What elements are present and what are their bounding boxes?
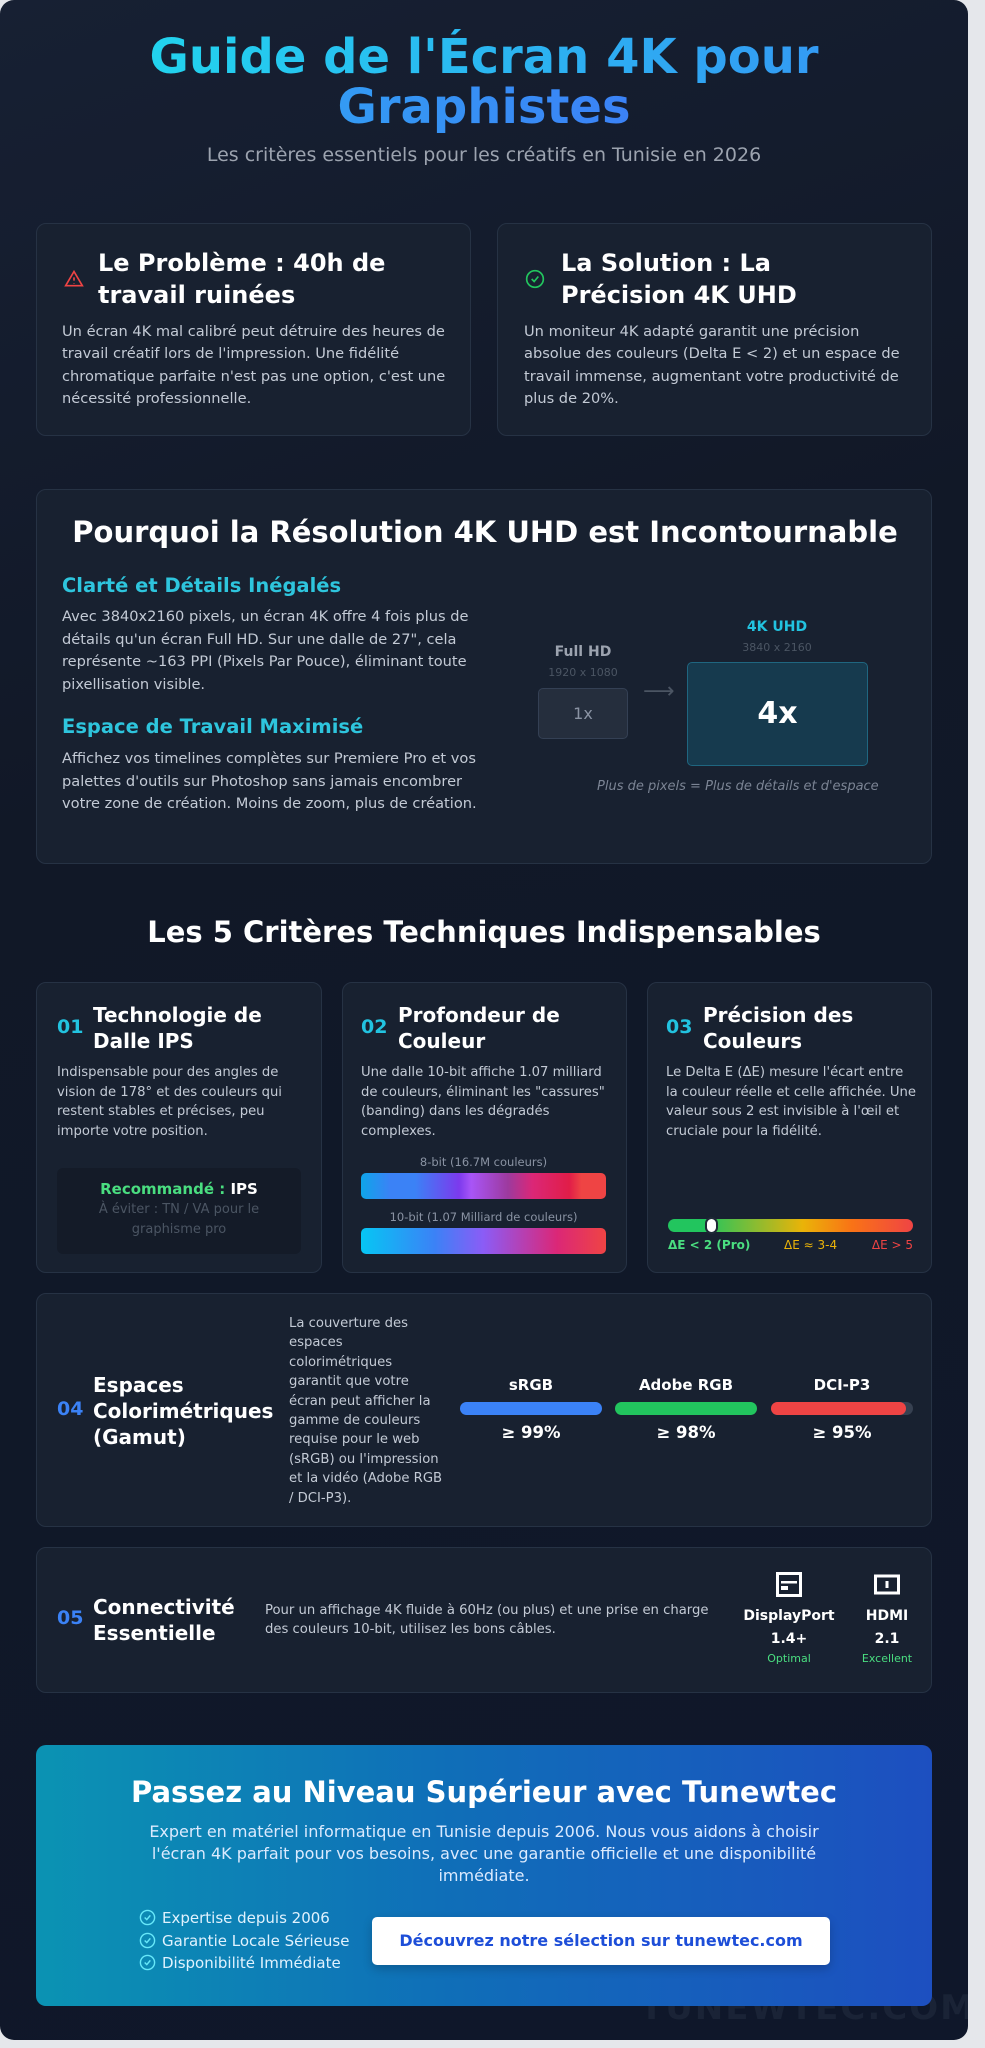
icon: hdmi: 2.1 — [875, 1631, 899, 1647]
button: Découvrez notre sélection sur tunewtec.com — [399, 1931, 803, 1950]
chart: 8-bit — [361, 1155, 606, 1199]
number 03: 03 — [666, 1016, 692, 1038]
heading: why: Pourquoi la Résolution 4K UHD est Incontournable — [72, 515, 898, 549]
panel: criterion 01 — [36, 982, 322, 1273]
number 02: 02 — [361, 1016, 387, 1038]
chart: DCI-P3 — [771, 1376, 913, 1442]
panel: solution — [497, 223, 932, 436]
number 01: 01 — [57, 1016, 83, 1038]
chart: resolution comparison — [538, 619, 879, 794]
chart: delta E scale: ΔE > 5 — [872, 1238, 913, 1252]
chart: delta E scale — [668, 1219, 913, 1252]
chart: 8-bit: 8-bit (16.7M couleurs) — [420, 1155, 547, 1169]
box: 4x — [687, 662, 868, 766]
chart: delta E scale: ΔE < 2 (Pro) — [668, 1238, 750, 1252]
label: full hd: Full HD — [555, 644, 611, 660]
text 05: Pour un affichage 4K fluide à 60Hz (ou plus) et une prise en charge des couleurs 10-bit, utilisez les bons câbles. — [265, 1603, 708, 1637]
chart: Adobe RGB: ≥ 98% — [656, 1423, 716, 1442]
heading 02: Profondeur de Couleur — [398, 1003, 560, 1053]
chart: Adobe RGB: Adobe RGB — [639, 1376, 733, 1394]
panel: criterion 03 — [647, 982, 932, 1273]
heading: 5 criteria: Les 5 Critères Techniques Indispensables — [147, 915, 821, 949]
chart: sRGB: ≥ 99% — [501, 1423, 561, 1442]
text: CTA: Expert en matériel informatique en Tunisie depuis 2006. Nous vous aidons à choisir l'écran 4K parfait pour vos besoins, avec une garantie officielle et une disponibilité immédiate. — [149, 1822, 819, 1885]
checklist — [140, 1909, 349, 1972]
number 05: 05 — [57, 1607, 83, 1629]
icon: displayport: Optimal — [767, 1652, 811, 1665]
box: 4x: 4x — [757, 696, 798, 731]
callout: recommended: Recommandé : IPS — [100, 1180, 258, 1198]
text: problem: Un écran 4K mal calibré peut détruire des heures de travail créatif lors de l'impression. Une fidélité chromatique parfaite n'est pas une option, c'est une nécessité professionnelle. — [62, 323, 445, 407]
chart: resolution comparison: 1920 x 1080 — [548, 666, 618, 679]
callout: recommended: À éviter : TN / VA pour le graphisme pro — [99, 1202, 259, 1236]
button — [372, 1917, 830, 1965]
checklist: Garantie Locale Sérieuse — [162, 1932, 349, 1950]
heading 03: Précision des Couleurs — [703, 1003, 853, 1053]
chart: 10-bit — [361, 1210, 606, 1254]
box: 1x — [538, 688, 628, 739]
heading 01: Technologie de Dalle IPS — [93, 1003, 262, 1053]
panel: why 4K — [36, 489, 932, 864]
chart: Adobe RGB — [615, 1376, 757, 1442]
heading 05: Connectivité Essentielle — [93, 1595, 235, 1645]
icon: hdmi — [862, 1574, 912, 1665]
chart: sRGB — [460, 1376, 602, 1442]
icon: displayport: 1.4+ — [771, 1631, 807, 1647]
callout: recommended — [57, 1168, 301, 1254]
subheading: workspace: Espace de Travail Maximisé — [62, 715, 363, 738]
panel: criterion 04 — [36, 1293, 932, 1527]
watermark: TUNEWTEC.COM — [640, 1988, 968, 2028]
chart: resolution comparison: 3840 x 2160 — [742, 641, 812, 654]
icon: hdmi: HDMI — [866, 1608, 908, 1624]
chart: DCI-P3: DCI-P3 — [814, 1376, 870, 1394]
heading: solution: La Solution : La Précision 4K UHD — [561, 249, 797, 309]
subtitle: Les critères essentiels pour les créatifs en Tunisie en 2026 — [207, 144, 761, 166]
box: 1x: 1x — [573, 704, 593, 723]
panel: problem — [36, 223, 471, 436]
number 04: 04 — [57, 1398, 83, 1420]
icon: warning — [64, 270, 84, 286]
checklist: Expertise depuis 2006 — [162, 1909, 330, 1927]
icon: hdmi: Excellent — [862, 1652, 912, 1665]
caption: Plus de pixels = Plus de détails et d'espace — [597, 779, 879, 794]
chart: delta E scale: ΔE ≈ 3-4 — [784, 1238, 837, 1252]
icon: check — [526, 270, 544, 288]
icon: displayport — [743, 1572, 835, 1665]
label: 4k: 4K UHD — [747, 619, 807, 635]
text: solution: Un moniteur 4K adapté garantit une précision absolue des couleurs (Delta E < 2) et un espace de travail immense, augmentant votre productivité de plus de 20%. — [524, 323, 900, 407]
heading: problem: Le Problème : 40h de travail ruinées — [98, 249, 385, 309]
title — [149, 29, 819, 135]
text 02: Une dalle 10-bit affiche 1.07 milliard de couleurs, éliminant les "cassures" (banding) dans les dégradés complexes. — [361, 1065, 605, 1138]
title: Guide de l'Écran 4K pour — [149, 29, 819, 85]
text: workspace: Affichez vos timelines complètes sur Premiere Pro et vos palettes d'outils sur Photoshop sans jamais encombrer votre zone de création. Moins de zoom, plus de création. — [62, 750, 477, 812]
icon: displayport: DisplayPort — [743, 1608, 835, 1624]
title: Graphistes — [337, 79, 631, 135]
text 03: Le Delta E (ΔE) mesure l'écart entre la couleur réelle et celle affichée. Une valeur sous 2 est invisible à l'œil et cruciale pour la fidélité. — [666, 1065, 916, 1138]
text: clarity: Avec 3840x2160 pixels, un écran 4K offre 4 fois plus de détails qu'un écran Full HD. Sur une dalle de 27", cela représente ~163 PPI (Pixels Par Pouce), éliminant toute pixellisation visible. — [62, 608, 468, 693]
chart: 10-bit: 10-bit (1.07 Milliard de couleurs) — [390, 1210, 577, 1224]
text 04: La couverture des espaces colorimétriques garantit que votre écran peut afficher la gamme de couleurs requise pour le web (sRGB) ou l'impression et la vidéo (Adobe RGB / DCI-P3). — [289, 1316, 442, 1506]
chart: sRGB: sRGB — [509, 1376, 553, 1394]
panel: CTA — [36, 1745, 932, 2006]
checklist: Disponibilité Immédiate — [162, 1954, 341, 1972]
text 01: Indispensable pour des angles de vision de 178° et des couleurs qui restent stables et précises, peu importe votre position. — [57, 1065, 282, 1138]
chart: DCI-P3: ≥ 95% — [812, 1423, 872, 1442]
arrow: ⟶ — [643, 679, 675, 704]
heading 04: Espaces Colorimétriques (Gamut) — [93, 1373, 273, 1449]
panel: criterion 02 — [342, 982, 627, 1273]
heading: CTA: Passez au Niveau Supérieur avec Tunewtec — [131, 1775, 837, 1809]
panel: criterion 05 — [36, 1547, 932, 1693]
subheading: clarity: Clarté et Détails Inégalés — [62, 574, 341, 597]
